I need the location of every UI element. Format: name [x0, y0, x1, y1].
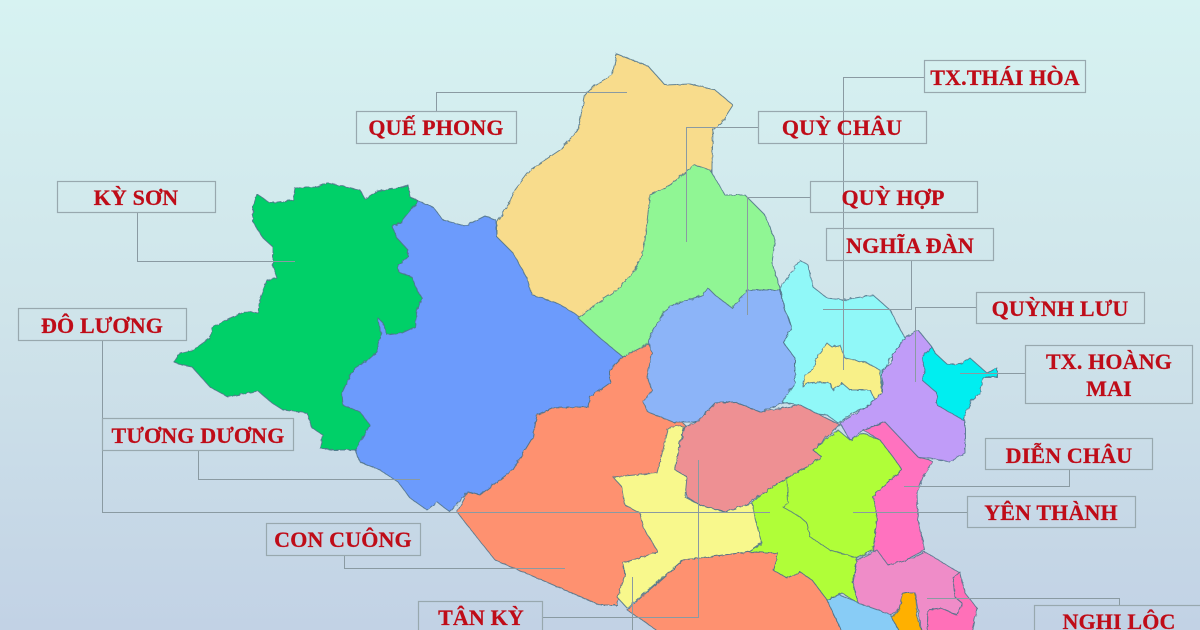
label: Quỳnh Lưu	[976, 292, 1144, 324]
label: Tân Kỳ	[418, 602, 542, 630]
label: TX. Hoàng Mai: TX. HOÀNG	[1046, 349, 1172, 374]
label: Quỳ Châu	[758, 112, 926, 144]
label: TX. Thái Hòa: TX.THÁI HÒA	[930, 65, 1080, 90]
label: Đô Lương	[18, 308, 186, 340]
district: Thái Hòa	[803, 343, 882, 400]
district: Con Cuông	[457, 344, 690, 605]
label: Quỳ Hợp	[810, 182, 978, 212]
district: Yên Thành and Đô Lương	[748, 430, 902, 603]
label: Đô Lương: ĐÔ LƯƠNG	[41, 313, 163, 338]
label: Kỳ Sơn	[58, 182, 216, 212]
label: TX. Hoàng Mai	[1026, 346, 1192, 404]
district: Quỳ Châu	[578, 165, 785, 357]
label: TX. Hoàng Mai: MAI	[1086, 376, 1132, 401]
label: Quỳ Hợp: QUỲ HỢP	[841, 185, 945, 210]
district: Nghĩa Đàn	[780, 260, 905, 423]
district: Hưng Nguyên	[892, 593, 925, 630]
district: Kỳ Sơn	[174, 183, 422, 450]
district: Hoàng Mai	[922, 347, 997, 420]
label: Quỳ Châu: QUỲ CHÂU	[782, 115, 902, 140]
district: Quế Phong	[497, 54, 733, 330]
district: Diễn Châu	[863, 422, 933, 565]
district: Quỳ Hợp	[643, 288, 795, 422]
map of districts	[174, 54, 997, 630]
label: Con Cuông	[266, 524, 420, 556]
label: Tương Dương: TƯƠNG DƯƠNG	[112, 423, 284, 448]
label: Diễn Châu: DIỄN CHÂU	[1006, 443, 1132, 468]
label: Yên Thành: YÊN THÀNH	[984, 500, 1118, 525]
label: Nghĩa Đàn: NGHĨA ĐÀN	[846, 233, 974, 258]
label: Tân Kỳ: TÂN KỲ	[438, 605, 524, 630]
label: Nghĩa Đàn	[826, 228, 994, 260]
district: Tân Kỳ	[613, 425, 762, 608]
label: Quỳnh Lưu: QUỲNH LƯU	[992, 296, 1128, 321]
district: Thanh Chương	[627, 552, 846, 630]
district: coast area	[927, 572, 977, 630]
district: Quỳnh Lưu	[840, 330, 965, 462]
leader lines	[102, 78, 1120, 630]
label: Quế Phong: QUẾ PHONG	[368, 115, 504, 140]
label: Quế Phong	[356, 112, 516, 144]
district: Tương Dương	[335, 201, 623, 512]
label: Nghi Lộc	[1034, 606, 1200, 630]
label: Kỳ Sơn: KỲ SƠN	[94, 185, 178, 210]
district: Anh Sơn	[675, 402, 840, 512]
district: Nam Đàn	[827, 595, 904, 630]
label: Yên Thành	[968, 496, 1136, 528]
label: Diễn Châu	[986, 438, 1152, 470]
district: Nghi Lộc	[853, 550, 962, 630]
label: Con Cuông: CON CUÔNG	[274, 527, 412, 552]
